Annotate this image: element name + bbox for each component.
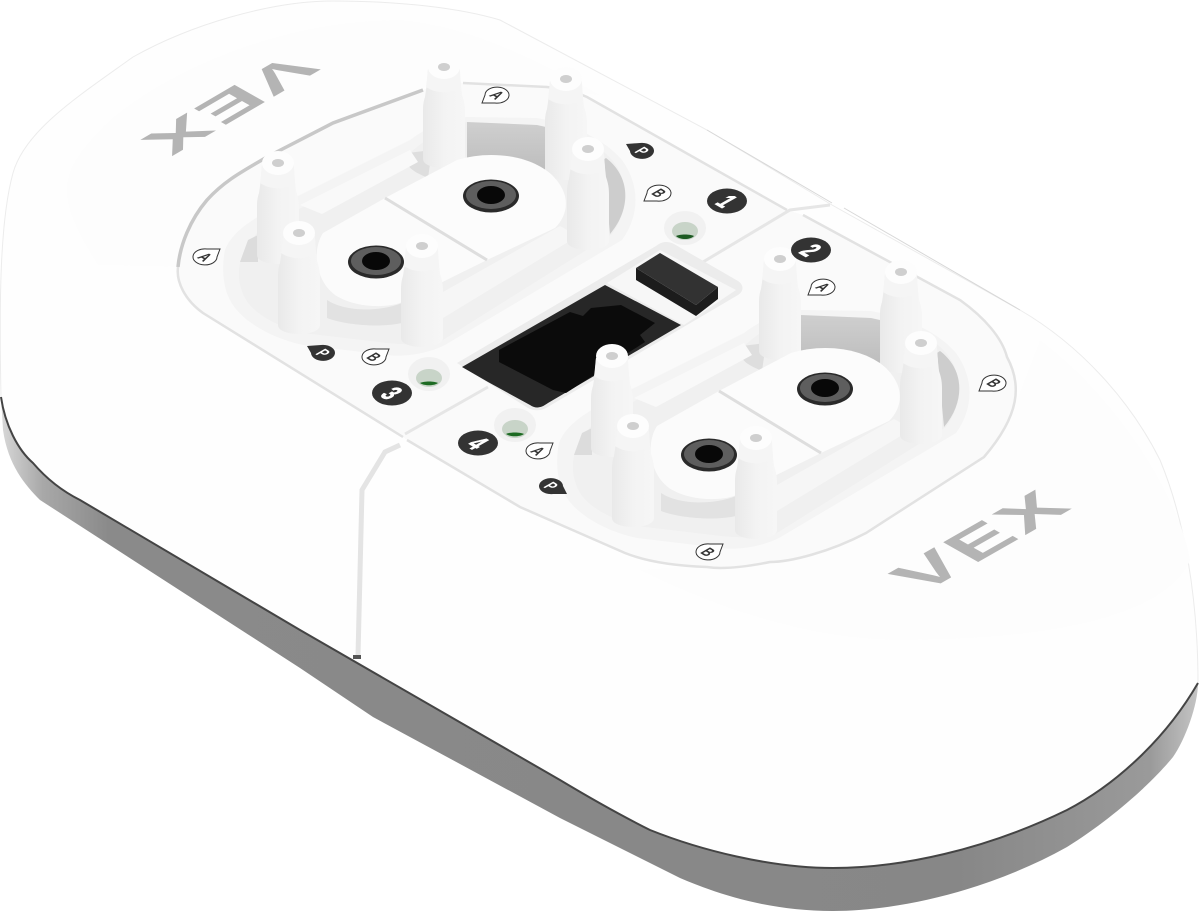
center plate xyxy=(178,83,1016,568)
connector block side xyxy=(636,268,718,316)
right half mount xyxy=(385,155,566,260)
left slot shadow xyxy=(407,150,432,178)
label P: P xyxy=(311,347,334,360)
cross seams xyxy=(405,205,830,434)
badge 1: 1 xyxy=(709,191,744,211)
panel: ports recess xyxy=(457,242,742,410)
body seam xyxy=(358,445,400,656)
ethernet port outer xyxy=(462,285,681,407)
peg xyxy=(880,260,922,373)
peg xyxy=(401,234,443,347)
led 1 xyxy=(664,211,706,245)
label B: B xyxy=(981,377,1005,390)
screw xyxy=(348,246,404,278)
cavity floor xyxy=(239,122,625,344)
right crescent shadow xyxy=(937,351,959,427)
right half mount xyxy=(719,348,900,453)
led 3 xyxy=(408,357,450,391)
plate groove upper left xyxy=(178,90,423,267)
back wall shadow xyxy=(467,122,560,172)
thin top edge xyxy=(707,130,1020,310)
label A: A xyxy=(484,89,508,102)
upper band xyxy=(300,150,418,214)
cavity rim xyxy=(223,117,636,356)
ethernet port inner xyxy=(499,305,655,393)
dark edge line xyxy=(1,397,1198,868)
peg xyxy=(612,414,654,527)
label A: A xyxy=(525,445,549,458)
label B: B xyxy=(695,546,719,559)
cavity floor xyxy=(573,315,959,537)
connector block top xyxy=(636,253,718,305)
screw xyxy=(681,438,737,472)
badge 2: 2 xyxy=(793,240,828,260)
label P: P xyxy=(539,480,562,493)
lower band xyxy=(443,226,578,318)
left half mount xyxy=(317,198,487,306)
peg xyxy=(735,426,777,539)
label P xyxy=(307,345,335,361)
badge 4: 4 xyxy=(460,433,495,453)
lower band xyxy=(777,419,912,511)
panel: right pod xyxy=(557,247,970,549)
right crescent shadow xyxy=(603,158,625,234)
badge 3: 3 xyxy=(374,383,409,403)
back wall shadow xyxy=(801,315,894,365)
front step xyxy=(661,493,736,518)
screw xyxy=(797,372,853,406)
label B: B xyxy=(361,351,385,364)
peg xyxy=(900,331,942,444)
peg xyxy=(759,247,801,360)
peg xyxy=(278,221,320,334)
peg xyxy=(591,344,633,457)
screw xyxy=(463,180,519,212)
label A: A xyxy=(810,281,834,294)
left half mount xyxy=(651,391,821,499)
front step xyxy=(327,300,402,325)
mount divider xyxy=(719,391,821,453)
peg xyxy=(567,137,609,250)
cavity rim xyxy=(557,310,970,549)
mount divider xyxy=(385,198,487,260)
peg xyxy=(545,67,587,180)
seam notch xyxy=(353,655,361,659)
logo: VEX lower right: VEX xyxy=(876,480,1087,600)
left corner shadow xyxy=(240,235,258,262)
left slot shadow xyxy=(741,343,766,371)
device side wall xyxy=(1,397,1198,911)
peg xyxy=(257,151,299,264)
led 4 xyxy=(494,408,536,442)
tray xyxy=(607,250,736,325)
panel: left pod xyxy=(223,55,636,356)
label B: B xyxy=(646,187,670,200)
label A: A xyxy=(192,251,216,264)
label P: P xyxy=(630,145,653,158)
recess rim xyxy=(457,242,742,410)
dish left lobe xyxy=(67,20,600,267)
dish right lobe xyxy=(640,340,1190,640)
left corner shadow xyxy=(574,428,592,455)
upper band xyxy=(634,343,752,407)
plate groove rest xyxy=(178,83,1016,568)
peg xyxy=(423,55,465,168)
label P xyxy=(539,478,567,494)
logo: VEX upper left: VEX xyxy=(127,47,331,165)
label P xyxy=(626,143,654,159)
